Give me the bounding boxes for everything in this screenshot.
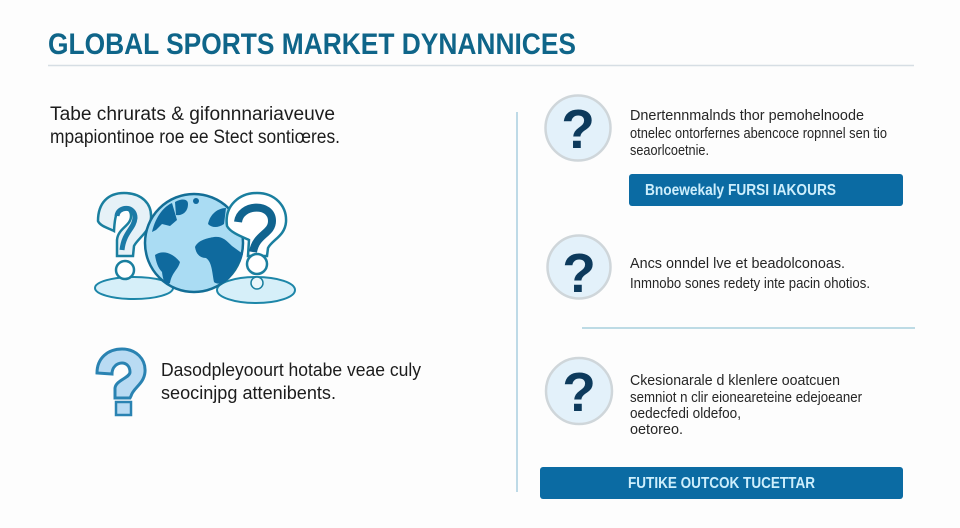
icon: globe with question marks: [95, 193, 295, 303]
icon: left question mark: [98, 193, 151, 279]
text block 1: otnelec ontorfernes abencoce ropnnel sen tio: [630, 126, 887, 142]
text block 3: Ckesionarale d klenlere ooatcuen: [630, 373, 840, 389]
left intro text: [50, 104, 340, 148]
button: future outlook: FUTIKE OUTCOK TUCETTAR: [628, 475, 815, 492]
icon: right base ellipse: [217, 277, 295, 303]
left intro text: mpapiontinoe roe ee Stect sontiœres.: [50, 127, 340, 148]
left lower text: seocinjpg attenibents.: [161, 383, 336, 403]
text block 3: [630, 373, 862, 438]
button: first callout: Bnoewekaly FURSI IAKOURS: [645, 182, 836, 199]
button: first callout: [629, 174, 903, 206]
icon: left base ellipse: [95, 277, 173, 299]
button: future outlook: [540, 467, 903, 499]
text block 1: seaorlcoetnie.: [630, 143, 709, 159]
left lower text: Dasodpleyoourt hotabe veae culy: [161, 360, 421, 380]
icon: question circle 3: [546, 358, 612, 424]
title: GLOBAL SPORTS MARKET DYNANNICES: [48, 28, 576, 61]
text block 2: Ancs onndel lve et beadolconoas.: [630, 255, 845, 272]
icon: question circle 1: [546, 96, 610, 160]
vertical divider: [516, 112, 518, 492]
icon: question circle 2: ?: [562, 242, 596, 304]
left intro text: Tabe chrurats & gifonnnariaveuve: [50, 104, 335, 125]
icon: question circle 1: ?: [561, 98, 595, 160]
icon: question circle 2: [548, 236, 610, 304]
text block 1: [630, 108, 887, 159]
text block 3: oetoreo.: [630, 422, 683, 438]
icon: globe: [145, 194, 243, 292]
left lower text: [161, 360, 421, 403]
text block 3: semniot n clir eioneareteine edejoeaner: [630, 390, 862, 406]
text block 1: Dnertennmalnds thor pemohelnoode: [630, 108, 864, 124]
text block 3: oedecfedi oldefoo,: [630, 406, 741, 422]
text block 2: Inmnobo sones redety inte pacin ohotios.: [630, 275, 870, 292]
icon: small question mark: [97, 349, 145, 415]
icon: right question mark: [227, 193, 286, 289]
icon: question circle 3: ?: [562, 361, 596, 423]
text block 2: [630, 255, 870, 292]
